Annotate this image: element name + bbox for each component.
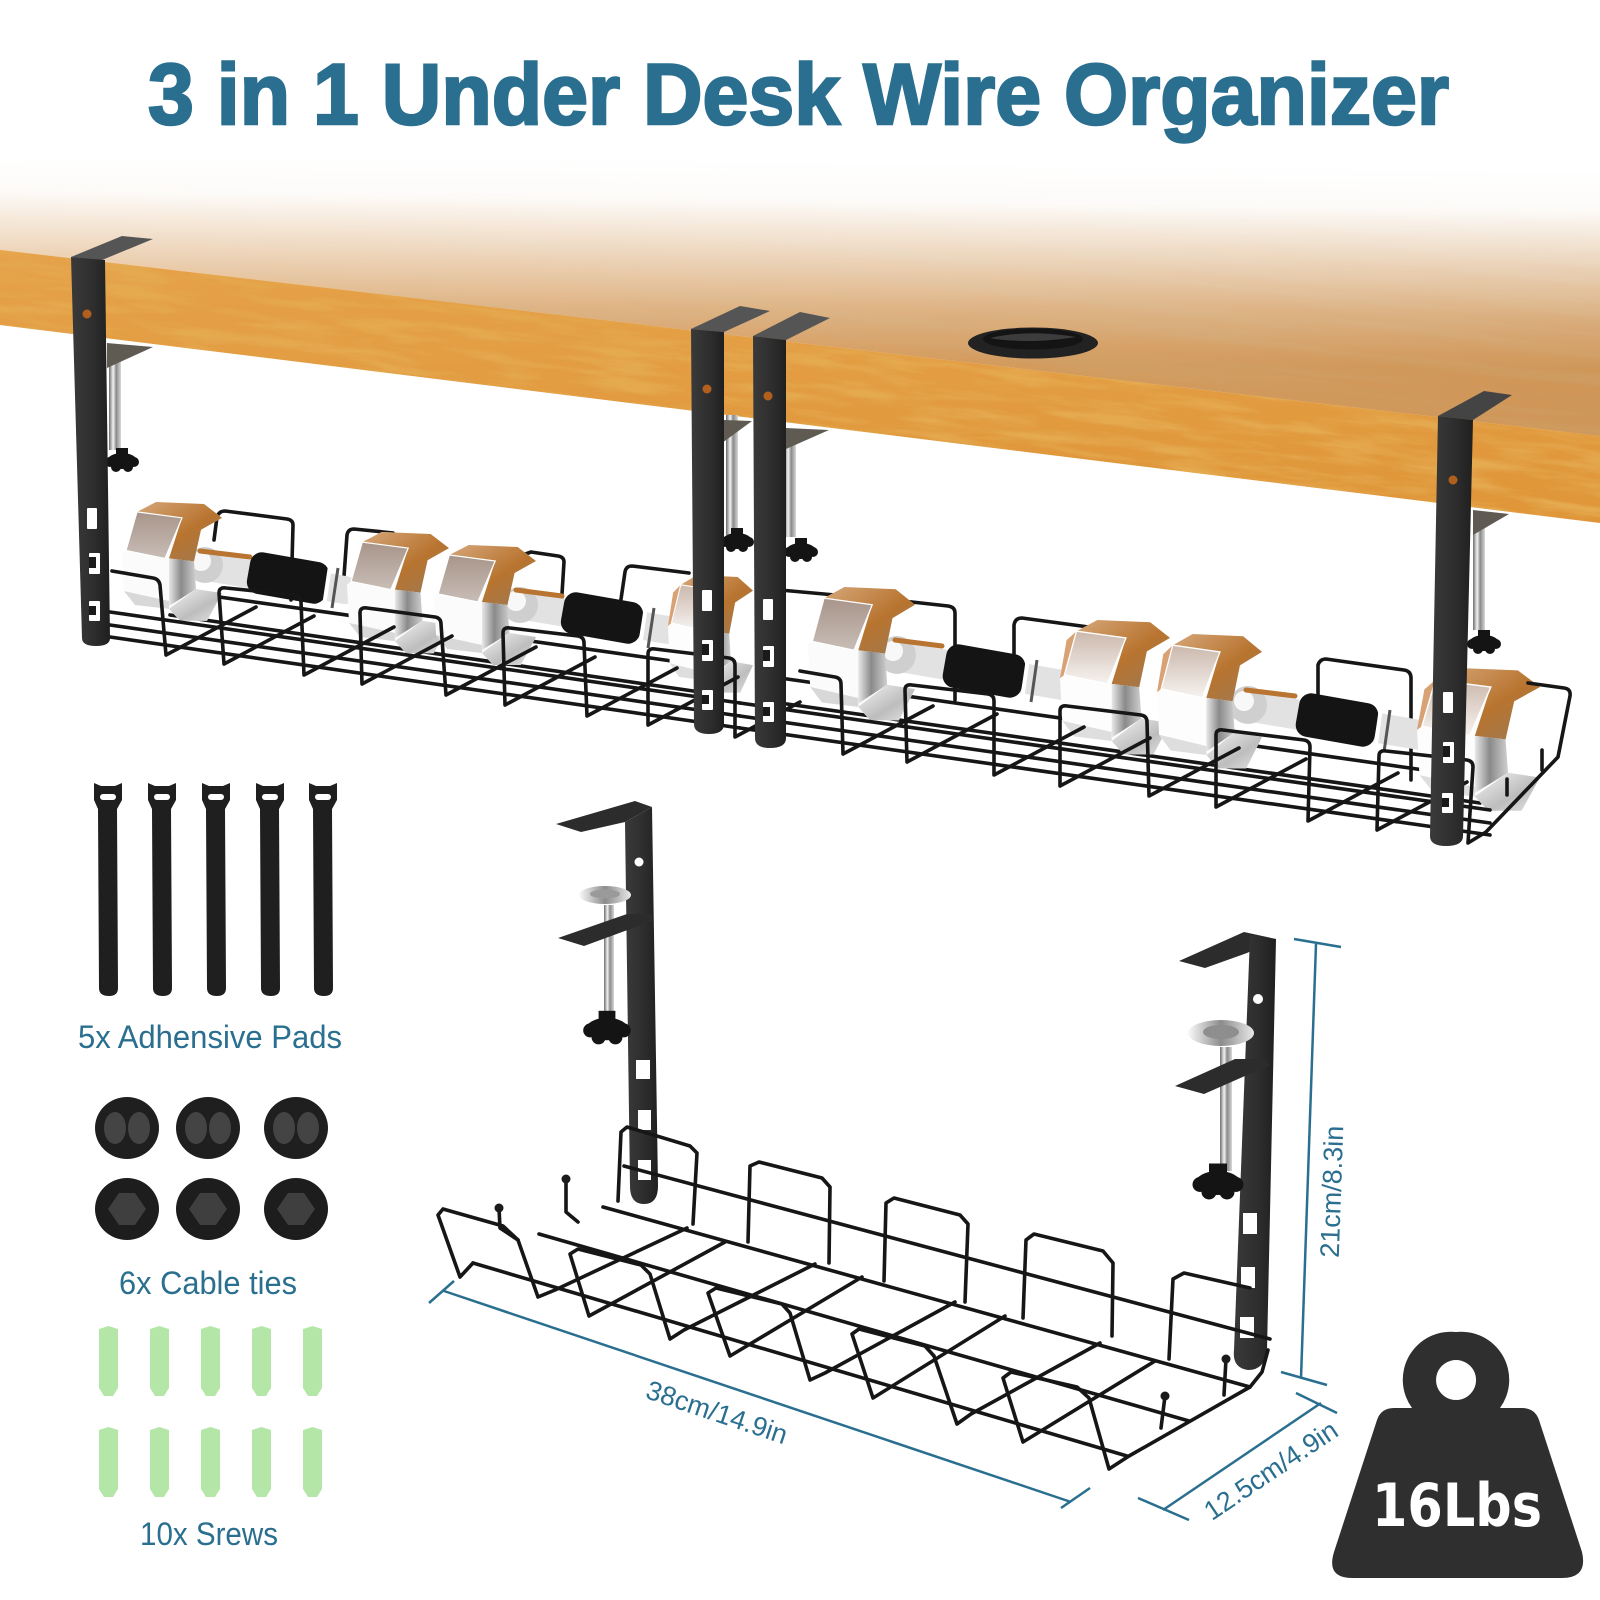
label: width dimension: 12.5cm/4.9in — [1198, 1415, 1343, 1526]
label: length dimension: 38cm/14.9in — [642, 1375, 791, 1450]
hook and loop straps — [94, 783, 337, 996]
icon: cable grommet — [968, 328, 1098, 358]
lower right bracket — [1175, 932, 1276, 1370]
upper bracket one — [71, 236, 153, 646]
weight value: 16Lbs — [1372, 1471, 1542, 1541]
handle: bundle one — [187, 547, 345, 608]
upper bracket four — [1430, 391, 1512, 846]
label: screws: 10x Srews — [140, 1516, 278, 1552]
label: cable ties: 6x Cable ties — [119, 1265, 297, 1301]
desk — [0, 192, 1600, 523]
handle: bundle two — [502, 587, 668, 648]
dimension line: width — [1138, 1393, 1337, 1520]
dimension line: height — [1281, 939, 1341, 1385]
label: adhesive pads: 5x Adhensive Pads — [78, 1019, 342, 1055]
lower left bracket — [556, 801, 658, 1204]
title: 3 in 1 Under Desk Wire Organizer — [148, 47, 1449, 143]
upper bracket two — [691, 306, 770, 734]
green wall plugs — [99, 1326, 322, 1497]
upper right wire basket — [740, 671, 1570, 843]
rear wires of upper baskets — [170, 511, 1480, 803]
handle: bundle four — [1229, 686, 1420, 752]
upper bracket three — [753, 312, 830, 748]
label: height dimension: 21cm/8.3in — [1315, 1125, 1349, 1258]
upper left wire basket — [110, 571, 800, 737]
clamp screws on upper brackets — [105, 343, 1509, 654]
handle: bundle three — [878, 636, 1062, 702]
dimension line: length — [429, 1281, 1090, 1508]
wire hook tips — [494, 1174, 1230, 1400]
cable clips — [95, 1097, 328, 1240]
weight icon: 16 lbs capacity — [1332, 1332, 1583, 1578]
cable bundles in upper baskets — [122, 502, 1540, 811]
lower wire basket — [438, 1127, 1270, 1469]
